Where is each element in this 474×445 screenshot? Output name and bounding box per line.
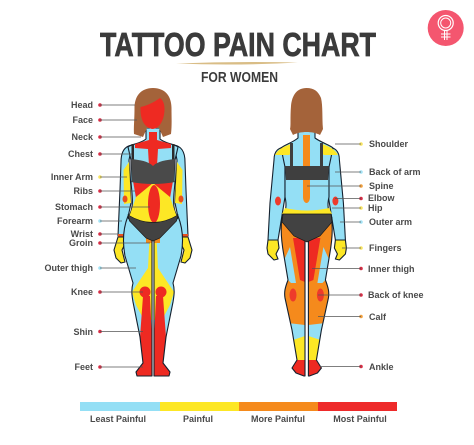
front left half <box>114 145 154 378</box>
title underline swash <box>176 62 298 65</box>
label: ribs: Ribs <box>73 186 93 196</box>
stomach red zone <box>148 185 160 223</box>
back right half <box>307 146 346 378</box>
back underwear <box>282 214 332 242</box>
front right half <box>152 145 192 378</box>
label: head: Head <box>71 100 93 110</box>
back bra <box>285 143 329 180</box>
subtitle: FOR WOMEN <box>201 70 278 86</box>
label: forearm <box>57 216 122 226</box>
legend: most painful: Most Painful <box>333 414 387 424</box>
title: TATTOO PAIN CHART <box>100 26 376 63</box>
label: knee <box>71 287 143 297</box>
label: chest <box>68 149 132 159</box>
shoulder yellow zones <box>275 144 338 155</box>
label: feet: Feet <box>74 362 93 372</box>
bra straps <box>132 144 174 160</box>
label: inner arm <box>51 172 127 182</box>
back figure <box>267 88 346 378</box>
legend: painful: Painful <box>183 414 213 424</box>
ribs pain zone <box>133 181 173 198</box>
label: stomach <box>55 202 150 212</box>
label: wrist <box>71 229 118 239</box>
label: outer thigh <box>44 263 136 273</box>
front figure <box>114 88 192 378</box>
torso <box>128 128 178 240</box>
spine <box>303 135 310 203</box>
label: shin <box>74 327 143 337</box>
label: outer arm <box>340 217 412 227</box>
label: forearm: Forearm <box>57 216 93 226</box>
label: shoulder <box>335 139 408 149</box>
label: stomach: Stomach <box>55 202 93 212</box>
stomach yellow zone <box>128 183 178 228</box>
label: shoulder: Shoulder <box>369 139 408 149</box>
label: back of arm <box>335 167 421 177</box>
hip yellow band <box>282 208 332 214</box>
label: feet <box>74 362 143 372</box>
label: calf: Calf <box>369 312 387 322</box>
label: back of knee: Back of knee <box>368 290 424 300</box>
label: knee: Knee <box>71 287 93 297</box>
label: calf <box>318 312 387 322</box>
label: outer arm: Outer arm <box>369 217 412 227</box>
label: elbow <box>335 193 395 203</box>
label: back of arm: Back of arm <box>369 167 421 177</box>
legend: more painful <box>239 402 318 424</box>
label: head <box>71 100 135 110</box>
legend: least painful <box>80 402 160 424</box>
label: neck <box>71 132 141 142</box>
label: spine <box>307 181 394 191</box>
icon: female symbol badge <box>428 10 464 46</box>
legend <box>80 402 397 424</box>
label: inner thigh <box>312 264 414 274</box>
label: chest: Chest <box>68 149 93 159</box>
label: face: Face <box>72 115 93 125</box>
label: hip: Hip <box>368 203 383 213</box>
label: fingers: Fingers <box>369 243 402 253</box>
label: inner thigh: Inner thigh <box>368 264 414 274</box>
legend: most painful <box>318 402 397 424</box>
back torso <box>281 130 333 240</box>
label: outer thigh: Outer thigh <box>44 263 93 273</box>
back left half <box>267 146 306 378</box>
label: inner arm: Inner Arm <box>51 172 93 182</box>
label: ankle: Ankle <box>369 362 394 372</box>
label: face <box>72 115 137 125</box>
left labels <box>44 100 150 372</box>
label: groin <box>69 238 150 248</box>
right labels <box>307 139 424 372</box>
legend: more painful: More Painful <box>251 414 305 424</box>
underwear <box>128 215 178 241</box>
label: fingers <box>342 243 402 253</box>
bra cups <box>131 159 175 184</box>
hair <box>134 88 172 137</box>
label: neck: Neck <box>71 132 94 142</box>
legend: painful <box>160 402 239 424</box>
label: groin: Groin <box>69 238 93 248</box>
label: ankle <box>320 362 394 372</box>
label: hip <box>332 203 383 213</box>
face <box>140 98 164 129</box>
back hair <box>290 88 323 135</box>
label: spine: Spine <box>369 181 394 191</box>
label: ribs <box>73 186 135 196</box>
label: wrist: Wrist <box>71 229 93 239</box>
label: shin: Shin <box>74 327 93 337</box>
legend: least painful: Least Painful <box>90 414 146 424</box>
label: elbow: Elbow <box>368 193 395 203</box>
chest pain zone <box>135 132 171 166</box>
label: back of knee <box>318 290 424 300</box>
